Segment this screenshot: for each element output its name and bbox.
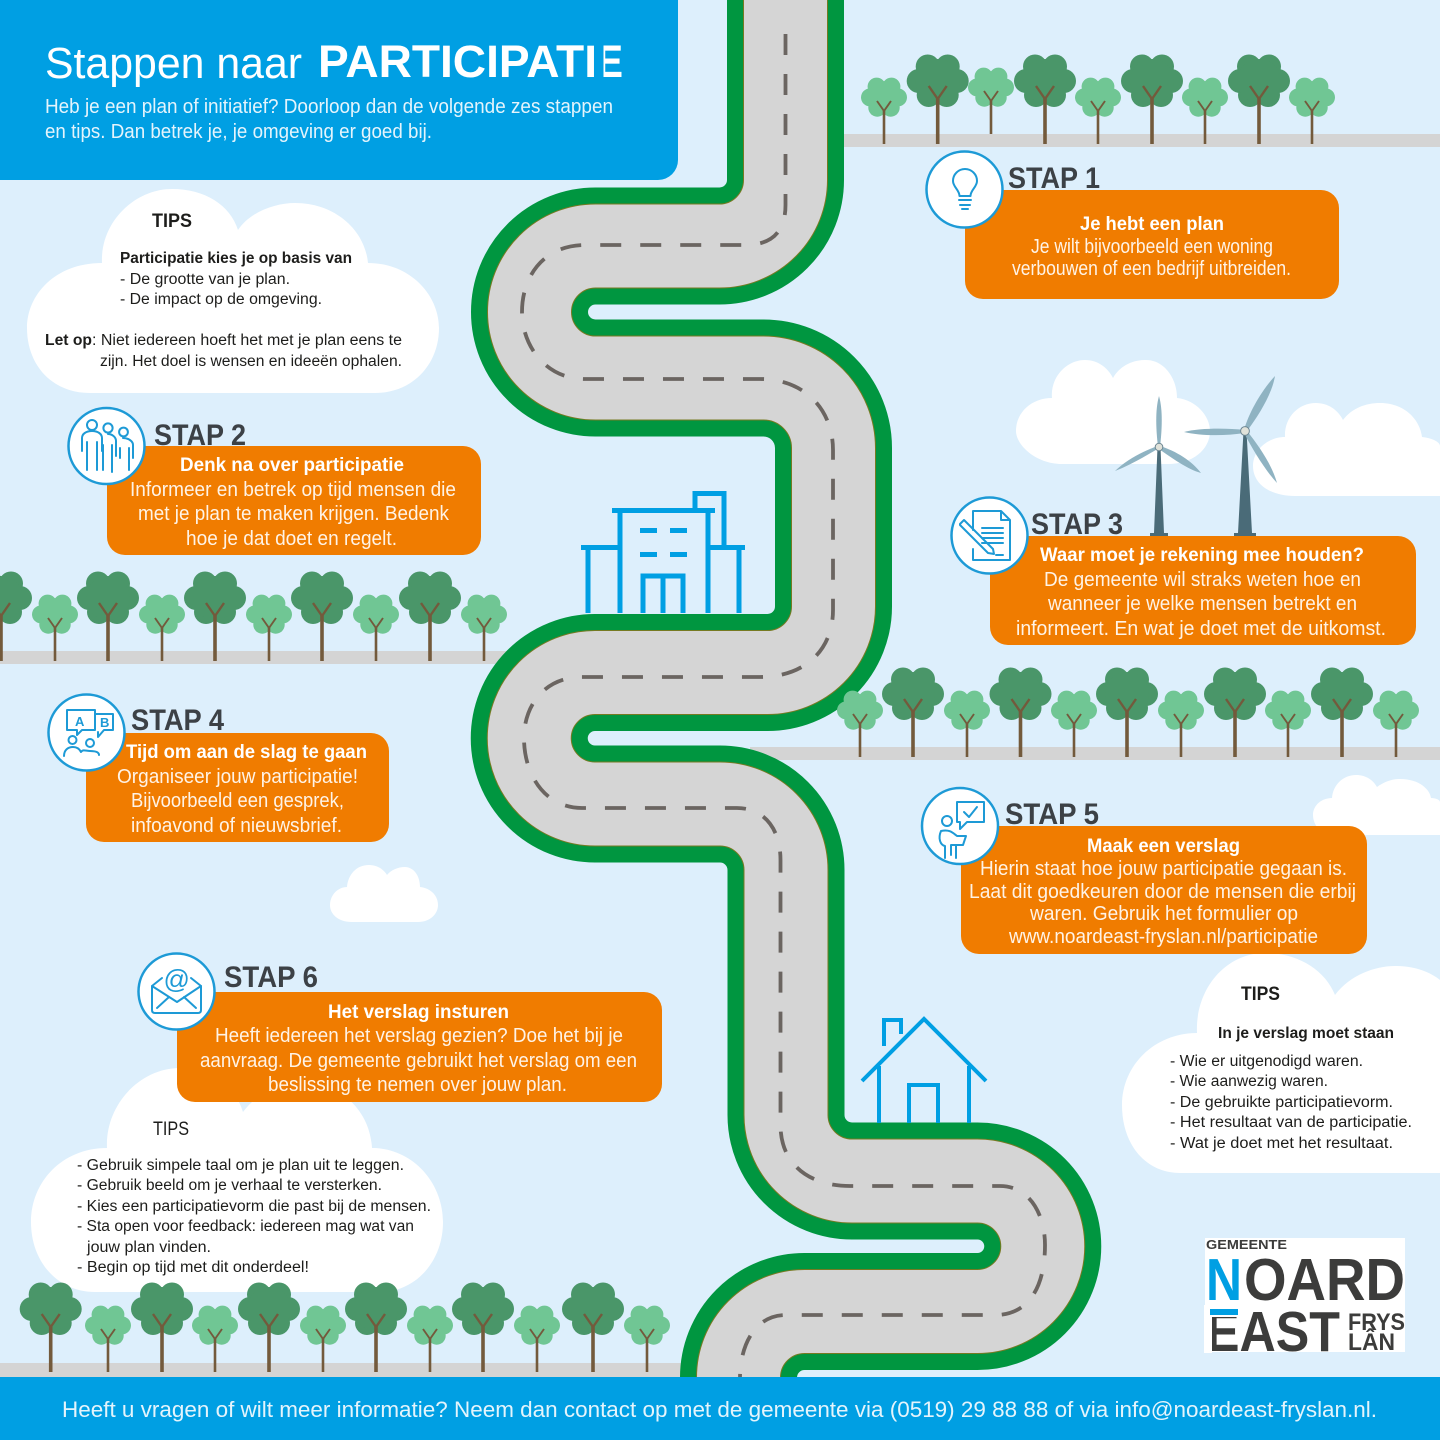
footer bar <box>0 1377 1440 1440</box>
stap 6 box: aanvraag. De gemeente gebruikt het verslag om een <box>200 1050 637 1072</box>
tips text: - Het resultaat van de participatie. <box>1170 1114 1412 1131</box>
tips text <box>77 1157 431 1276</box>
stap 4 box: infoavond of nieuwsbrief. <box>131 815 342 837</box>
title <box>45 36 623 88</box>
stap 4 box: Organiseer jouw participatie! <box>117 766 358 788</box>
wind turbines <box>1115 376 1277 536</box>
tips text: - Begin op tijd met dit onderdeel! <box>77 1259 309 1276</box>
stap 3 box <box>990 536 1416 645</box>
intro text: en tips. Dan betrek je, je omgeving er goed bij. <box>45 121 432 143</box>
footer bar: Heeft u vragen of wilt meer informatie? Neem dan contact op met de gemeente via (0519) 29 88 88 of via info@noardeast-fryslan.nl. <box>62 1397 1377 1422</box>
stap 6 heading: STAP 6 <box>224 961 318 994</box>
panel: stap 2 <box>68 408 481 555</box>
logo: Gemeente Noardeast-Fryslan: GEMEENTE <box>1206 1237 1287 1252</box>
logo: Gemeente Noardeast-Fryslan: N <box>1206 1247 1242 1313</box>
tips text: - De grootte van je plan. <box>120 271 290 288</box>
stap 4 box: Tijd om aan de slag te gaan <box>126 742 367 763</box>
tips text: - Wat je doet met het resultaat. <box>1170 1135 1393 1152</box>
tips text: : Niet iedereen hoeft het met je plan eens te <box>92 332 402 349</box>
stap 1 box: verbouwen of een bedrijf uitbreiden. <box>1012 258 1291 280</box>
stap 4 box <box>86 733 389 842</box>
tips text: Participatie kies je op basis van <box>120 250 352 267</box>
stap 5 heading: STAP 5 <box>1005 798 1099 831</box>
icon: envelope with at sign <box>138 954 214 1030</box>
stap 3 box: De gemeente wil straks weten hoe en <box>1044 569 1361 591</box>
stap 6 box: beslissing te nemen over jouw plan. <box>268 1074 567 1096</box>
panel: stap 5 <box>922 788 1367 954</box>
row of trees: left middle <box>0 572 507 661</box>
stap 5 box: www.noardeast-fryslan.nl/participatie <box>1008 926 1318 948</box>
stap 5 box: Maak een verslag <box>1087 836 1240 857</box>
icon: speech bubbles and people: A <box>75 714 85 729</box>
stap 2 heading: STAP 2 <box>154 419 246 452</box>
stap 6 box: Het verslag insturen <box>328 1002 509 1023</box>
stap 3 box: Waar moet je rekening mee houden? <box>1040 545 1364 566</box>
icon: speech bubbles and people: B <box>100 715 109 730</box>
tips text: - Wie er uitgenodigd waren. <box>1170 1053 1363 1070</box>
stap 2 box: met je plan te maken krijgen. Bedenk <box>138 503 450 525</box>
stap 6 box <box>177 992 662 1102</box>
icon: speech bubbles and people <box>48 694 124 770</box>
title: Stappen naar <box>45 39 302 88</box>
stap 5 box <box>961 826 1367 954</box>
panel: tips cloud 2 <box>1122 953 1440 1173</box>
stap 1 box: Je wilt bijvoorbeeld een woning <box>1031 236 1273 258</box>
stap 2 box: hoe je dat doet en regelt. <box>186 528 397 550</box>
stap 5 box: Laat dit goedkeuren door de mensen die erbij <box>969 881 1356 903</box>
panel: stap 4 <box>48 694 389 842</box>
stap 2 box: Informeer en betrek op tijd mensen die <box>130 479 456 501</box>
stap 3 heading: STAP 3 <box>1031 508 1123 541</box>
stap 4 heading: STAP 4 <box>131 704 224 737</box>
logo: Gemeente Noardeast-Fryslan: EAST <box>1206 1300 1340 1364</box>
title: PARTICIPATI <box>318 36 597 87</box>
icon: person with speech bubble <box>922 788 998 864</box>
decorative clouds <box>330 360 1440 922</box>
intro text: Heb je een plan of initiatief? Doorloop dan de volgende zes stappen <box>45 96 613 118</box>
panel: header <box>0 0 678 180</box>
tips text: - Gebruik beeld om je verhaal te versterken. <box>77 1177 382 1194</box>
icon: envelope with at sign: @ <box>164 964 190 994</box>
tips heading: TIPS <box>152 211 192 232</box>
logo: Gemeente Noardeast-Fryslan: OARD <box>1244 1247 1405 1313</box>
logo: Gemeente Noardeast-Fryslan <box>1204 1237 1405 1364</box>
tips text: - Gebruik simpele taal om je plan uit te leggen. <box>77 1157 404 1174</box>
tips text: Let op <box>45 332 92 349</box>
stap 3 box: wanneer je welke mensen betrekt en <box>1047 593 1357 615</box>
stap 3 box: informeert. En wat je doet met de uitkomst. <box>1016 618 1386 640</box>
tips heading: TIPS <box>1241 984 1280 1005</box>
icon: group of people <box>68 408 144 484</box>
title: E <box>597 36 623 87</box>
icon: document and pencil <box>952 498 1028 574</box>
tips text: In je verslag moet staan <box>1218 1025 1394 1042</box>
tips text: jouw plan vinden. <box>86 1239 211 1256</box>
icon: office building <box>581 494 745 613</box>
icon: light bulb <box>926 152 1002 228</box>
stap 4 box: Bijvoorbeeld een gesprek, <box>131 790 344 812</box>
logo: Gemeente Noardeast-Fryslan: FRYS <box>1348 1309 1405 1336</box>
stap 5 box: Hierin staat hoe jouw participatie gegaan is. <box>980 858 1347 880</box>
row of trees: bottom left <box>20 1282 670 1372</box>
tips text: - De gebruikte participatievorm. <box>1170 1094 1393 1111</box>
stap 1 heading: STAP 1 <box>1008 162 1100 195</box>
row of trees: top right <box>861 54 1335 144</box>
tips text: - Sta open voor feedback: iedereen mag wat van <box>77 1218 414 1235</box>
tips text: zijn. Het doel is wensen en ideeën ophalen. <box>100 353 402 370</box>
icon: house <box>862 1019 986 1123</box>
panel: stap 1 <box>926 152 1339 299</box>
intro text <box>45 96 613 143</box>
logo: Gemeente Noardeast-Fryslan: LÂN <box>1348 1328 1395 1356</box>
panel: tips cloud 1 <box>27 189 439 393</box>
stap 6 box: Heeft iedereen het verslag gezien? Doe het bij je <box>215 1025 623 1047</box>
stap 5 box: waren. Gebruik het formulier op <box>1029 903 1298 925</box>
tips text: - Kies een participatievorm die past bij de mensen. <box>77 1198 431 1215</box>
stap 1 box <box>965 190 1339 299</box>
tips text: - Wie aanwezig waren. <box>1170 1073 1328 1090</box>
stap 1 box: Je hebt een plan <box>1080 214 1224 235</box>
panel: tips cloud 3 <box>31 1068 443 1292</box>
row of trees: right middle <box>837 668 1419 757</box>
panel: stap 3 <box>952 498 1416 645</box>
winding road <box>522 0 1045 1440</box>
tips text <box>45 250 402 370</box>
panel: stap 6 <box>138 954 662 1102</box>
tips heading: TIPS <box>153 1119 189 1140</box>
tips text: - De impact op de omgeving. <box>120 291 322 308</box>
stap 2 box: Denk na over participatie <box>180 455 404 476</box>
tips text <box>1170 1025 1412 1152</box>
stap 2 box <box>107 446 481 555</box>
